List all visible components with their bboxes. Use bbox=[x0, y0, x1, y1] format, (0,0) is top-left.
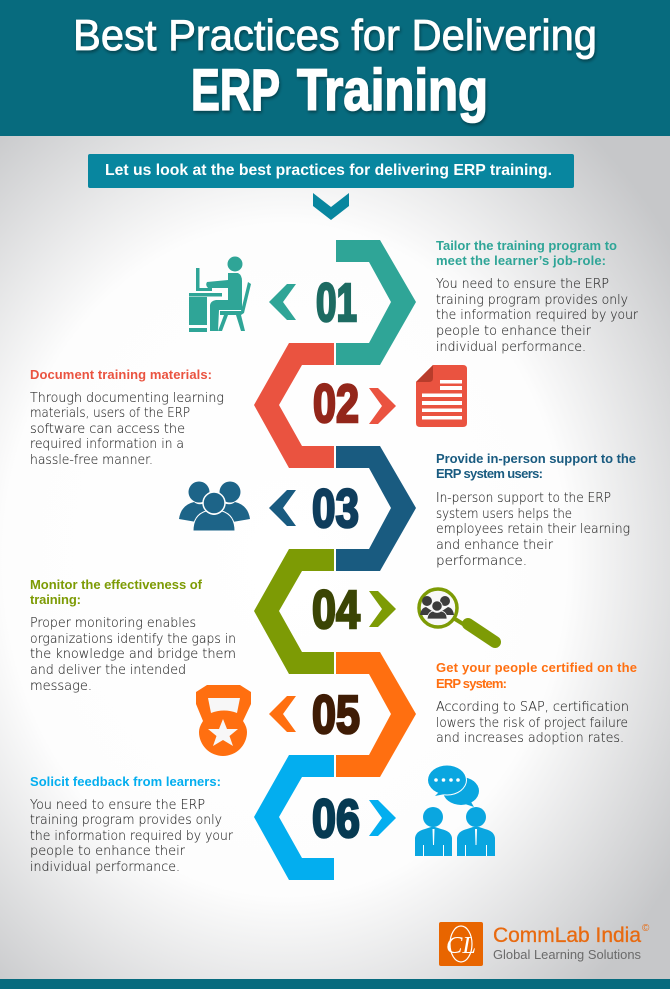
body bbox=[436, 491, 630, 569]
heading: Tailor the training program to bbox=[436, 238, 617, 253]
text block: certification bbox=[436, 660, 637, 746]
body: and enhance their bbox=[436, 538, 554, 553]
text block: tailor the training program bbox=[436, 238, 639, 355]
body: Proper monitoring enables bbox=[30, 616, 196, 631]
step 06 bbox=[254, 755, 495, 880]
chevron 04 bbox=[369, 591, 396, 627]
body bbox=[30, 391, 224, 468]
heading bbox=[436, 238, 617, 268]
heading: Monitor the effectiveness of bbox=[30, 577, 203, 592]
body: Through documenting learning bbox=[30, 391, 224, 406]
heading: training: bbox=[30, 592, 81, 607]
body: You need to ensure the ERP bbox=[436, 277, 609, 292]
tagline: Global Learning Solutions bbox=[493, 947, 641, 962]
text block: solicit feedback bbox=[30, 774, 234, 875]
text block: document training materials bbox=[30, 367, 224, 468]
body: people to enhance their bbox=[30, 844, 186, 859]
logo mark bbox=[439, 922, 483, 966]
number 02: 02 bbox=[313, 374, 359, 434]
icon: group of people bbox=[179, 482, 250, 531]
heading: meet the learner’s job-role: bbox=[436, 253, 606, 268]
heading: ERP system users: bbox=[436, 466, 543, 481]
body: training program provides only bbox=[436, 293, 628, 308]
text block: in-person support bbox=[436, 451, 636, 569]
text block: monitor effectiveness bbox=[30, 577, 236, 694]
copyright mark: © bbox=[642, 923, 650, 934]
chevron 05 bbox=[269, 696, 296, 732]
body bbox=[30, 798, 234, 875]
heading: ERP system: bbox=[436, 676, 507, 691]
body: system users helps the bbox=[436, 507, 572, 522]
intro banner: Let us look at the best practices for delivering ERP training. bbox=[105, 162, 552, 179]
footer band bbox=[0, 979, 670, 989]
body: organizations identify the gaps in bbox=[30, 632, 236, 647]
logo: CommLab India bbox=[439, 922, 650, 966]
icon: person at desk bbox=[189, 256, 251, 332]
body: hassle-free manner. bbox=[30, 453, 153, 468]
number 01: 01 bbox=[316, 273, 357, 333]
icon: magnifier with people bbox=[419, 589, 495, 642]
body: materials, users of the ERP bbox=[30, 406, 190, 421]
chevron 01 bbox=[269, 284, 296, 320]
number 06: 06 bbox=[312, 789, 360, 849]
step 04 bbox=[254, 549, 495, 674]
body: In-person support to the ERP bbox=[436, 491, 611, 506]
body: message. bbox=[30, 679, 92, 694]
heading: Provide in-person support to the bbox=[436, 451, 636, 466]
hexagon bracket 05 bbox=[336, 652, 416, 777]
body: the knowledge and bridge them bbox=[30, 647, 236, 662]
body: and increases adoption rates. bbox=[436, 731, 624, 746]
number 04: 04 bbox=[312, 580, 360, 640]
hexagon bracket 03 bbox=[336, 446, 416, 571]
heading bbox=[436, 660, 637, 691]
heading bbox=[30, 577, 203, 607]
chevron 03 bbox=[269, 490, 296, 526]
step 01 bbox=[189, 240, 416, 365]
heading: Get your people certified on the bbox=[436, 660, 637, 675]
body: individual performance. bbox=[436, 340, 586, 355]
step 05 bbox=[196, 652, 416, 777]
title line 1: Best Practices for Delivering bbox=[73, 11, 597, 60]
body: required information in a bbox=[30, 437, 184, 452]
body: You need to ensure the ERP bbox=[30, 798, 205, 813]
company name: CommLab India bbox=[493, 924, 641, 947]
body: According to SAP, certification bbox=[436, 700, 629, 715]
body: performance. bbox=[436, 554, 527, 569]
step 02 bbox=[254, 343, 467, 468]
body: individual performance. bbox=[30, 860, 180, 875]
icon: document bbox=[416, 365, 467, 427]
icon: medal badge bbox=[196, 685, 251, 756]
body: people to enhance their bbox=[436, 324, 592, 339]
body: and deliver the intended bbox=[30, 663, 186, 678]
title line 2 bbox=[191, 58, 488, 123]
title line 2: ERP bbox=[191, 58, 280, 123]
heading: Document training materials: bbox=[30, 367, 212, 382]
body bbox=[436, 277, 639, 355]
body: the information required by your bbox=[30, 829, 234, 844]
title line 2: Training bbox=[297, 58, 488, 123]
logo mark: CL bbox=[446, 933, 476, 959]
number 05: 05 bbox=[312, 685, 360, 745]
hexagon bracket 06 bbox=[254, 755, 334, 880]
body bbox=[30, 616, 236, 694]
body: employees retain their learning bbox=[436, 522, 630, 537]
heading: Solicit feedback from learners: bbox=[30, 774, 221, 789]
intro banner bbox=[88, 154, 574, 188]
hexagon bracket 01 bbox=[336, 240, 416, 365]
header band with title bbox=[0, 0, 670, 136]
heading bbox=[436, 451, 636, 481]
body: lowers the risk of project failure bbox=[436, 716, 628, 731]
arrow: down chevron bbox=[313, 193, 349, 220]
hexagon bracket 02 bbox=[254, 343, 334, 468]
body bbox=[436, 700, 629, 746]
body: software can access the bbox=[30, 422, 185, 437]
icon: two people talking bbox=[415, 764, 495, 856]
step 03 bbox=[179, 446, 416, 571]
chevron 02 bbox=[369, 388, 396, 424]
hexagon bracket 04 bbox=[254, 549, 334, 674]
number 03: 03 bbox=[312, 479, 359, 539]
body: training program provides only bbox=[30, 813, 222, 828]
chevron 06 bbox=[369, 800, 396, 836]
body: the information required by your bbox=[436, 308, 639, 323]
